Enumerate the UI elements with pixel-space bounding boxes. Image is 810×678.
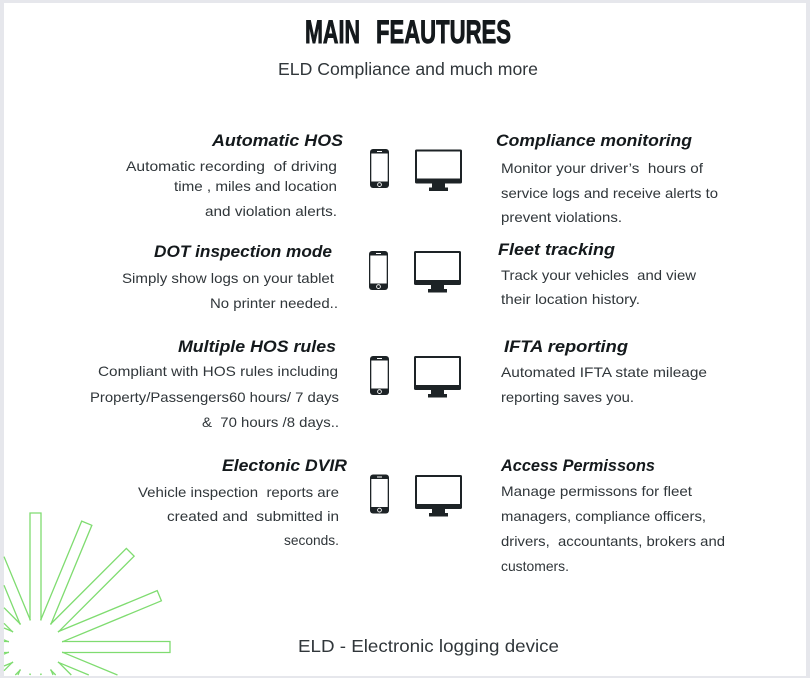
feature: Multiple HOS rules: Compliant with HOS rules including [98,363,338,379]
feature: Access Permissons [500,457,725,574]
feature: IFTA reporting: reporting saves you. [501,389,634,405]
feature: IFTA reporting [501,338,707,405]
feature: Fleet tracking [498,241,697,307]
title: MAIN [305,14,360,50]
feature: Access Permissons: Access Permissons [500,457,655,475]
feature: Compliance monitoring: prevent violations. [501,209,622,225]
feature: Electonic DVIR [138,457,347,548]
feature: Multiple HOS rules: & 70 hours /8 days.. [202,414,339,430]
feature: Access Permissons: drivers, accountants, brokers and [501,533,725,549]
feature: IFTA reporting: IFTA reporting [504,338,628,356]
feature: Compliance monitoring: Compliance monitoring [496,132,692,150]
feature: Electonic DVIR: seconds. [284,532,339,548]
feature: DOT inspection mode: Simply show logs on your tablet [122,270,334,286]
feature: Electonic DVIR: Electonic DVIR [222,457,347,475]
feature: Access Permissons: Manage permissons for fleet [501,483,692,499]
icons row 1 [370,149,462,191]
feature: DOT inspection mode: DOT inspection mode [154,243,332,261]
title: FEAUTURES [376,14,511,50]
feature: Automatic HOS: Automatic HOS [211,132,343,150]
feature: DOT inspection mode [122,243,338,311]
feature: DOT inspection mode: No printer needed.. [210,295,338,311]
icons row 4 [370,474,462,516]
feature: Automatic HOS: time , miles and location [174,178,337,194]
feature: Automatic HOS: Automatic recording of driving [126,158,337,174]
feature: Fleet tracking: Fleet tracking [498,241,615,259]
title [305,14,511,50]
feature: Fleet tracking: Track your vehicles and view [501,267,697,283]
feature: Multiple HOS rules: Property/Passengers60 hours/ 7 days [90,389,339,405]
feature: Electonic DVIR: created and submitted in [167,508,339,524]
subtitle: ELD Compliance and much more [278,59,538,79]
feature: Compliance monitoring: Monitor your driver’s hours of [501,160,703,176]
feature: Compliance monitoring: service logs and receive alerts to [501,185,718,201]
feature: Multiple HOS rules: Multiple HOS rules [178,338,336,356]
feature: Access Permissons: customers. [501,558,569,574]
feature: Multiple HOS rules [90,338,339,430]
decorative sunburst [4,513,170,675]
feature: Access Permissons: managers, compliance officers, [501,508,706,524]
feature: Fleet tracking: their location history. [501,291,640,307]
feature: Automatic HOS: and violation alerts. [205,203,337,219]
icons row 2 [369,251,461,292]
feature: Compliance monitoring [496,132,718,225]
icons row 3 [370,356,461,398]
feature: Electonic DVIR: Vehicle inspection reports are [138,484,339,500]
footer caption: ELD - Electronic logging device [298,636,559,656]
feature: Automatic HOS [126,132,343,219]
feature: IFTA reporting: Automated IFTA state mileage [501,364,707,380]
